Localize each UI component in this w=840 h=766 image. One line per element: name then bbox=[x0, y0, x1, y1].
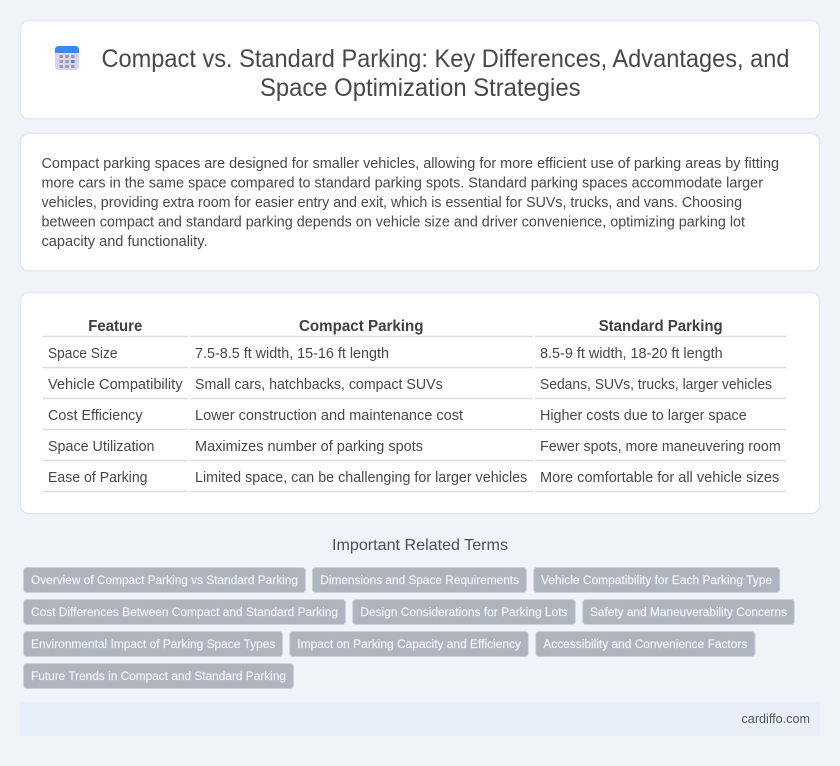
tag bbox=[536, 632, 755, 656]
row: space size: 8.5-9 ft width, 18-20 ft length bbox=[540, 346, 723, 362]
tag bbox=[24, 568, 306, 592]
panel: introduction paragraph: capacity and functionality. bbox=[42, 234, 208, 250]
row: ease of parking: Ease of Parking bbox=[48, 470, 148, 486]
panel: comparison table bbox=[20, 292, 820, 514]
tag bbox=[534, 568, 780, 592]
tag: Future Trends in Compact and Standard Parking bbox=[31, 669, 286, 683]
row: cost efficiency: Cost Efficiency bbox=[48, 408, 143, 424]
tag bbox=[312, 568, 526, 592]
row: space size: Space Size bbox=[48, 346, 118, 362]
tag bbox=[583, 600, 794, 624]
row: space utilization: Space Utilization bbox=[48, 439, 154, 455]
tag: Accessibility and Convenience Factors bbox=[543, 637, 747, 651]
row: vehicle compatibility: Small cars, hatchbacks, compact SUVs bbox=[195, 377, 443, 393]
tag bbox=[24, 664, 294, 688]
row: space size: 7.5-8.5 ft width, 15-16 ft length bbox=[195, 346, 389, 362]
row: space utilization: Fewer spots, more maneuvering room bbox=[540, 439, 781, 455]
heading: important related terms: Important Related Terms bbox=[332, 537, 508, 554]
row: vehicle compatibility: Vehicle Compatibility bbox=[48, 377, 183, 393]
tag: Vehicle Compatibility for Each Parking Type bbox=[541, 573, 772, 587]
panel: introduction paragraph: Compact parking spaces are designed for smaller vehicles, allowing for more efficient use of parking areas by fitting bbox=[42, 156, 779, 172]
panel: introduction paragraph bbox=[20, 134, 820, 271]
footer: cardiffo.com bbox=[742, 712, 810, 726]
icon: calendar grid bbox=[55, 46, 79, 70]
table header row: Compact Parking bbox=[299, 318, 424, 335]
panel: introduction paragraph: more cars in the same space compared to standard parking spots. Standard parking spaces accommodate larger bbox=[42, 176, 763, 192]
row: ease of parking: Limited space, can be challenging for larger vehicles bbox=[195, 470, 527, 486]
row: ease of parking bbox=[48, 470, 779, 486]
row: space size bbox=[48, 346, 723, 362]
tag: Safety and Maneuverability Concerns bbox=[590, 605, 787, 619]
row: vehicle compatibility: Sedans, SUVs, trucks, larger vehicles bbox=[540, 377, 772, 393]
title: Space Optimization Strategies bbox=[260, 74, 580, 102]
tag bbox=[24, 600, 346, 624]
panel: introduction paragraph: between compact and standard parking depends on vehicle size and driver convenience, optimizing parking lot bbox=[42, 214, 745, 230]
title: Compact vs. Standard Parking: Key Differences, Advantages, and bbox=[102, 45, 790, 73]
table header row: Standard Parking bbox=[599, 318, 723, 335]
tag: Design Considerations for Parking Lots bbox=[360, 605, 568, 619]
tag: Overview of Compact Parking vs Standard Parking bbox=[31, 573, 298, 587]
row: cost efficiency bbox=[48, 408, 747, 424]
title bbox=[102, 45, 790, 102]
tag: Environmental Impact of Parking Space Types bbox=[31, 637, 275, 651]
tag: Cost Differences Between Compact and Standard Parking bbox=[31, 605, 338, 619]
panel: title header bbox=[20, 20, 820, 119]
row: vehicle compatibility bbox=[48, 377, 772, 393]
row: cost efficiency: Higher costs due to larger space bbox=[540, 408, 747, 424]
row: space utilization: Maximizes number of parking spots bbox=[195, 439, 423, 455]
row: ease of parking: More comfortable for all vehicle sizes bbox=[540, 470, 779, 486]
tag bbox=[24, 632, 282, 656]
tag bbox=[290, 632, 528, 656]
tag: Dimensions and Space Requirements bbox=[320, 573, 519, 587]
table header row: Feature bbox=[88, 318, 143, 335]
row: cost efficiency: Lower construction and maintenance cost bbox=[195, 408, 463, 424]
tag: Impact on Parking Capacity and Efficiency bbox=[297, 637, 522, 651]
row: space utilization bbox=[48, 439, 781, 455]
footer bbox=[20, 702, 820, 736]
tag bbox=[353, 600, 575, 624]
table header row bbox=[88, 318, 723, 335]
panel: introduction paragraph: vehicles, providing extra room for easier entry and exit, which is essential for SUVs, trucks, and vans. Choosing bbox=[42, 195, 742, 211]
tag list: related terms bbox=[24, 568, 794, 688]
